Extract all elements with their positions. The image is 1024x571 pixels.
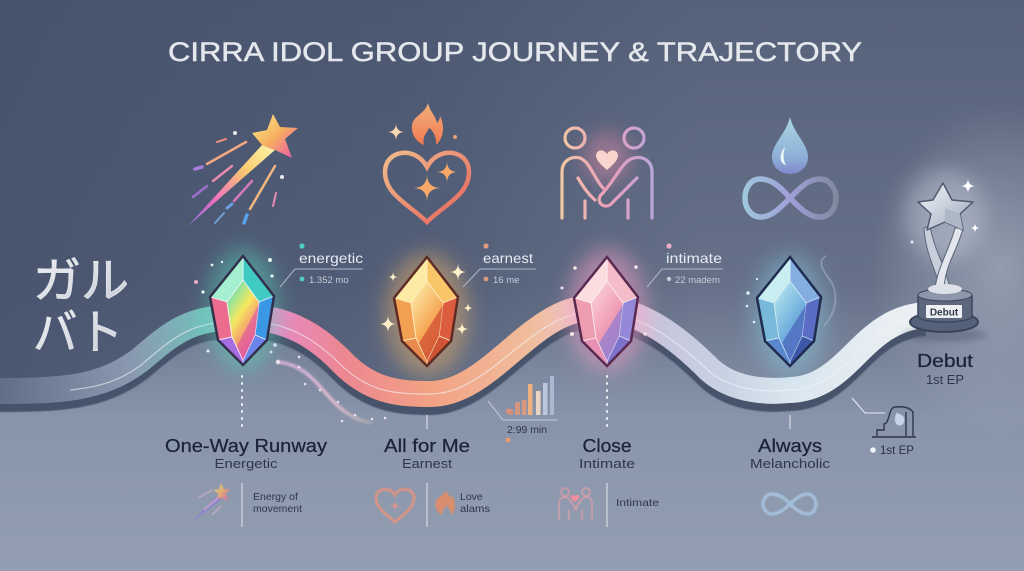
- legend: love alarms: Love: [460, 491, 483, 503]
- legend: energy of movement: [192, 483, 302, 527]
- callout: intimate: [647, 243, 723, 287]
- gem: All for Me: [379, 253, 473, 377]
- legend: intimate: [559, 483, 659, 527]
- label: All for Me: Earnest: [402, 456, 452, 471]
- icon: shooting star: [187, 114, 298, 227]
- katakana side title: [33, 255, 129, 360]
- label: One-Way Runway: [165, 435, 328, 471]
- label: All for Me: [384, 435, 470, 471]
- legend: love alarms: alams: [460, 503, 490, 515]
- label: One-Way Runway: One-Way Runway: [165, 435, 328, 456]
- label: Close: Close: [582, 435, 632, 456]
- gem: One-Way Runway: [194, 248, 279, 372]
- gem: Always: [746, 255, 835, 375]
- callout: energetic: 1.352 mo: [309, 275, 349, 286]
- label: Debut: 1st EP: [926, 372, 964, 387]
- callout: earnest: [463, 243, 536, 287]
- label: Always: [750, 435, 831, 471]
- callout: energetic: [280, 243, 363, 287]
- icon: flaming heart: [385, 103, 469, 222]
- title: CIRRA IDOL GROUP JOURNEY & TRAJECTORY: [168, 37, 862, 67]
- label: Debut: Debut: [917, 350, 973, 371]
- callout: 1st EP: [852, 398, 916, 457]
- callout: intimate: 22 madem: [675, 275, 720, 286]
- icon: water drop and infinity: [745, 117, 836, 217]
- dotted connector: One-Way Runway: [241, 376, 243, 428]
- legend: infinity: [763, 494, 816, 514]
- callout: 1st EP: 1st EP: [880, 443, 914, 457]
- label: Close: Intimate: [579, 456, 635, 471]
- bar chart callout: 2:99 min: [507, 424, 547, 436]
- katakana side title: ガル: [33, 255, 129, 308]
- label: All for Me: All for Me: [384, 435, 470, 456]
- callout: energetic: energetic: [299, 250, 363, 266]
- trophy: [903, 169, 987, 342]
- callout: earnest: earnest: [483, 250, 533, 266]
- sparkle trail: [270, 343, 386, 423]
- icon: two people holding hands: [562, 128, 652, 218]
- katakana side title: バト: [33, 307, 123, 360]
- label: Always: Always: [758, 435, 822, 456]
- connector: Always: [789, 415, 791, 429]
- label: Debut: [917, 350, 973, 387]
- dotted connector: Close: [606, 376, 608, 428]
- label: Always: Melancholic: [750, 456, 831, 471]
- legend: energy of movement: Energy of: [253, 491, 298, 503]
- callout: intimate: intimate: [666, 250, 722, 266]
- legend: love alarms: [376, 483, 490, 527]
- legend: energy of movement: movement: [253, 503, 302, 515]
- label: Close: [579, 435, 635, 471]
- trophy: Debut: [930, 308, 959, 318]
- bar chart callout: [488, 376, 558, 442]
- connector: All for Me: [426, 415, 428, 429]
- label: One-Way Runway: Energetic: [214, 456, 278, 471]
- legend: intimate: Intimate: [616, 497, 659, 509]
- gem: Close: [560, 248, 647, 372]
- callout: earnest: 16 me: [493, 275, 519, 286]
- journey ribbon: [0, 308, 925, 402]
